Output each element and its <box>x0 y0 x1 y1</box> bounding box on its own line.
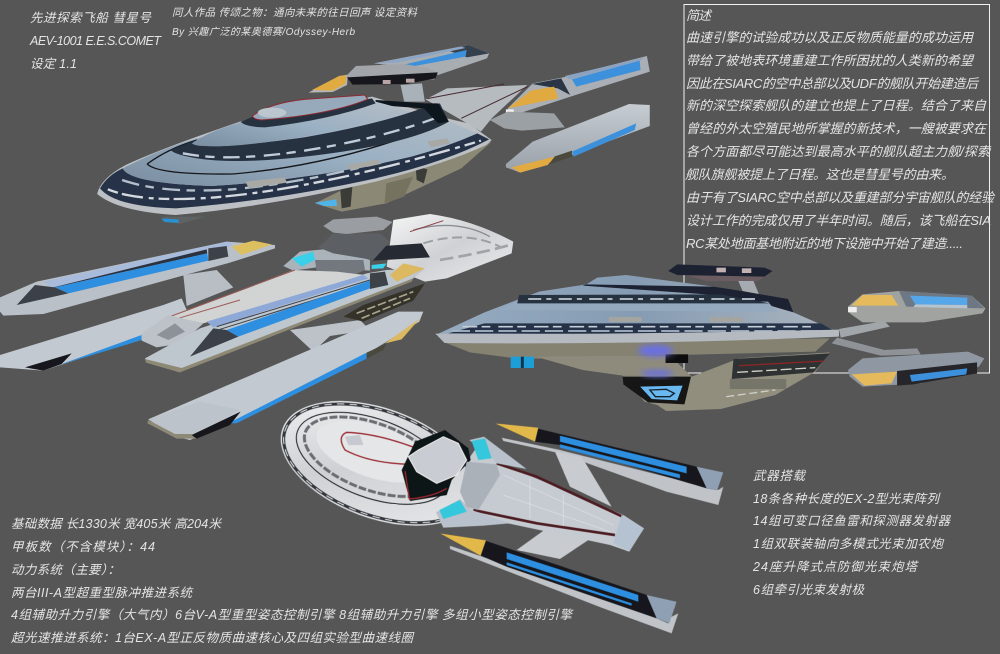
secondary hull <box>437 438 644 552</box>
neck and superstructure <box>283 233 390 277</box>
cyan panels <box>472 438 492 460</box>
lower nacelle <box>848 352 984 387</box>
bottom nacelle <box>440 533 678 633</box>
right lower nacelle <box>506 104 650 173</box>
base data text: 超光速推进系统：1台EX-A型正反物质曲速核心及四组实验型曲速线圈 <box>11 631 414 645</box>
title: version: 设定 1.1 <box>30 57 77 71</box>
saucer <box>264 377 493 550</box>
summary body: 设计工作的完成仅用了半年时间。随后，该飞船在SIA <box>686 213 991 228</box>
summary body: 曲速引擎的试验成功以及正反物质能量的成功运用 <box>686 30 975 45</box>
credit block <box>172 7 418 38</box>
rear nacelle gold cap <box>308 75 348 93</box>
ship view: rear three-quarter <box>0 214 513 440</box>
summary heading: 简述 <box>686 8 713 23</box>
keel and lower hull <box>445 338 830 411</box>
weapons text: 武器搭载 <box>753 469 806 483</box>
weapons text: 18条各种长度的EX-2型光束阵列 <box>753 492 941 506</box>
weapons text: 24座升降式点防御光束炮塔 <box>752 560 919 574</box>
upper pylon <box>183 270 233 306</box>
weapons text: 1组双联装轴向多模式光束加农炮 <box>753 537 944 551</box>
crown deck with red trim <box>252 95 368 120</box>
neck wedges <box>436 437 527 528</box>
summary body: 曾经的外太空殖民地所掌握的新技术，一艘被要求在 <box>686 121 988 136</box>
weapons text: 6组牵引光束发射极 <box>753 583 865 597</box>
upper nacelle <box>848 291 985 322</box>
summary body: 新的深空探索舰队的建立也提上了日程。结合了来自 <box>686 98 987 113</box>
belly <box>315 142 492 212</box>
saucer rim <box>435 330 839 343</box>
ship view: top three-quarter front <box>97 45 650 224</box>
base data text: 甲板数（不含模块）：44 <box>11 540 155 554</box>
weapons text: 14组可变口径鱼雷和探测器发射器 <box>753 514 951 528</box>
belly under main hull <box>343 283 425 322</box>
red trim on black <box>405 471 447 499</box>
main nacelle <box>145 263 425 372</box>
upper left nacelle <box>0 241 275 316</box>
weapons text <box>752 469 951 597</box>
summary body: 由于有了SIARC空中总部以及重建部分宇宙舰队的经验 <box>686 190 996 205</box>
black surround <box>402 430 471 501</box>
lower left nacelle <box>0 298 187 371</box>
credit line: 同人作品 传颂之物：通向未来的往日回声 设定资料 <box>172 7 418 19</box>
middle dark band <box>170 103 449 161</box>
flight deck <box>142 270 365 347</box>
title block <box>29 11 162 71</box>
lower strut <box>290 320 370 352</box>
saucer <box>373 214 513 282</box>
lower right nacelle <box>147 312 423 440</box>
nacelle struts <box>839 321 890 338</box>
title: registry: AEV-1001 E.E.S.COMET <box>29 34 162 48</box>
outer dark band <box>100 133 489 208</box>
upper deck <box>192 101 401 146</box>
ship view: side profile <box>435 264 985 411</box>
summary body: 舰队旗舰被提上了日程。这也是彗星号的由来。 <box>685 167 954 182</box>
base data text: 4组辅助升力引擎（大气内）6台V-A型重型姿态控制引擎 8组辅助升力引擎 多组小型姿态控制引擎 <box>11 608 574 622</box>
top nacelle <box>495 423 723 505</box>
lower strut <box>832 338 921 356</box>
cyan panel lower <box>439 500 467 519</box>
nacelle strut <box>490 112 565 131</box>
base data text: 基础数据 长1330米 宽405米 高204米 <box>11 517 222 531</box>
panel: summary frame <box>684 4 990 373</box>
engine glows <box>638 345 673 357</box>
command dish <box>408 437 467 483</box>
bottom wing <box>517 528 593 559</box>
dish <box>323 217 393 234</box>
lower glow <box>641 370 673 377</box>
lower deck <box>123 103 477 186</box>
upper wing <box>555 452 612 507</box>
right upper nacelle <box>506 56 650 116</box>
summary body: 因此在SIARC的空中总部以及UDF的舰队开始建造后 <box>686 76 980 91</box>
upper dark band <box>241 98 376 127</box>
base data text: 动力系统（主要）： <box>11 563 120 577</box>
ship view: top plan <box>264 377 723 633</box>
dish and pylon <box>668 264 772 294</box>
saucer hull <box>97 97 492 215</box>
base data text: 两台III-A型超重型脉冲推进系统 <box>11 586 194 600</box>
summary body: 带给了被地表环境重建工作所困扰的人类新的希望 <box>686 53 975 68</box>
summary body: RC某处地面基地附近的地下设施中开始了建造..... <box>686 236 963 251</box>
deflector dish <box>347 64 438 102</box>
summary body <box>685 30 996 251</box>
author line: By 兴趣广泛的某奥德赛/Odyssey-Herb <box>172 26 355 38</box>
summary body: 各个方面都尽可能达到最高水平的舰队超主力舰/探索 <box>686 144 992 159</box>
engineering hull <box>426 85 527 132</box>
rear upper nacelle <box>374 45 489 75</box>
deflector <box>623 377 691 404</box>
title: Chinese name: 先进探索飞船 彗星号 <box>30 11 152 25</box>
base data text <box>11 517 574 645</box>
summary text <box>685 8 996 251</box>
saucer upper decks <box>435 275 839 335</box>
